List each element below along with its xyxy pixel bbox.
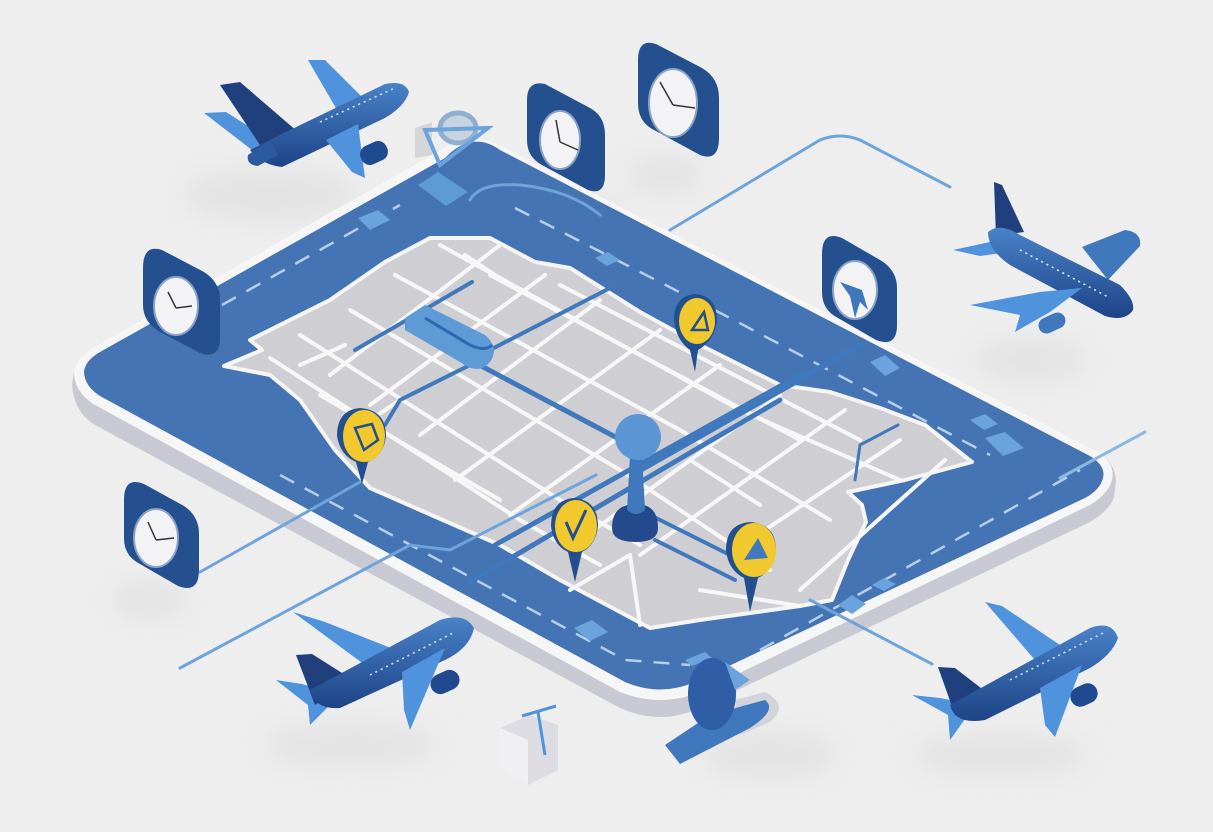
platform white rim [74, 139, 1113, 700]
yellow pin: south [551, 498, 598, 582]
clock: top right [638, 43, 719, 157]
plane: bottom left [276, 612, 474, 730]
clock: top centre [527, 83, 605, 191]
runway dashes [222, 205, 1080, 665]
yellow pin: north [674, 294, 717, 372]
route lines [180, 136, 1145, 668]
platform blue surface [84, 142, 1103, 689]
central blue pin [612, 414, 661, 542]
map centre shuttle [405, 305, 494, 369]
soft ground shadows [110, 157, 1090, 777]
clock: right with plane [822, 236, 897, 342]
platform base [72, 139, 1116, 717]
clock: left [143, 249, 220, 355]
map streets [270, 245, 945, 625]
clock: lower left [124, 482, 199, 588]
yellow pin: west [337, 408, 386, 484]
plane: bottom right [912, 602, 1118, 740]
tape / connector top of platform [415, 113, 488, 206]
plane: top right [953, 182, 1140, 336]
bottom device: satellite dish shape [665, 658, 779, 764]
plane: top left [204, 60, 409, 178]
yellow pin: east [726, 522, 776, 612]
small tiles on runway [358, 210, 1024, 666]
parcel box [500, 706, 558, 785]
map [224, 238, 972, 628]
